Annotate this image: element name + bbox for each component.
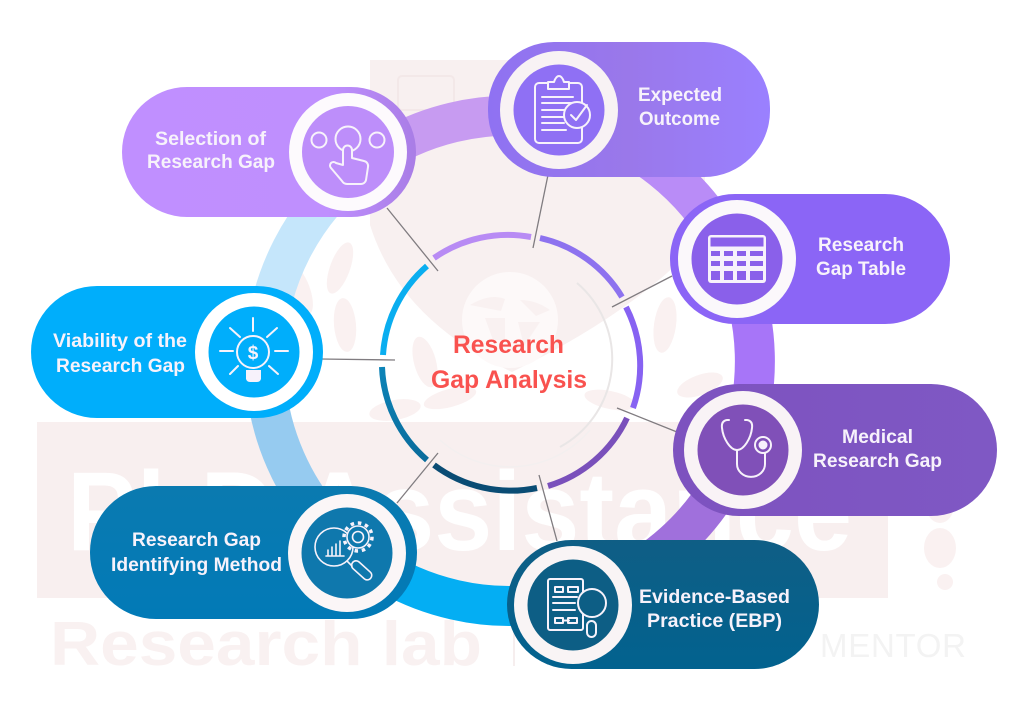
icon: document with magnifier (548, 579, 606, 637)
watermark: PhD Assistance Research lab logo: MENTOR (820, 627, 966, 664)
centre title: Research (453, 332, 564, 359)
panel: Selection of Research Gap (122, 87, 416, 217)
icon: table grid (708, 235, 766, 283)
panel: Expected Outcome: Expected (638, 85, 722, 106)
watermark: PhD Assistance Research lab logo: Research lab (50, 610, 482, 679)
panel: Viability of the Research Gap (31, 286, 323, 418)
panel: Research Gap Table: Research (818, 235, 904, 256)
outer ring (265, 116, 755, 606)
panel: Evidence-Based Practice (507, 540, 819, 669)
panel: Expected Outcome: Outcome (639, 109, 720, 130)
panel: Evidence-Based Practice: Practice (EBP) (647, 611, 782, 632)
panel: Research Gap Table (670, 194, 950, 324)
watermark: PhD Assistance Research lab logo (37, 60, 966, 679)
watermark: PhD Assistance Research lab logo: PhD Assistance (67, 449, 852, 574)
inner segmented ring (382, 235, 640, 491)
connector lines (320, 175, 677, 541)
panel: Medical Research Gap: Medical (842, 427, 913, 448)
centre title (431, 332, 587, 394)
icon: magnifier with chart and gear (315, 523, 374, 582)
panel: Evidence-Based Practice: Evidence-Based (639, 587, 790, 608)
panel: Medical Research Gap: Research Gap (813, 451, 942, 472)
panel: Research Gap Table: Gap Table (816, 259, 906, 280)
panel: Expected Outcome (488, 42, 770, 177)
icon: light bulb with dollar: $ (248, 343, 259, 364)
panel: Research Gap Identifying Method (90, 486, 417, 619)
panel: Research Gap Identifying Method: Identifying Method (111, 555, 282, 576)
panel: Viability of the Research Gap: Research Gap (56, 356, 185, 377)
panel: Selection of Research Gap: Research Gap (147, 152, 275, 173)
panel: Research Gap Identifying Method: Research Gap (132, 530, 261, 551)
centre title: Gap Analysis (431, 367, 587, 394)
panel: Selection of Research Gap: Selection of (155, 129, 267, 150)
panel: Viability of the Research Gap: Viability of the (53, 331, 187, 352)
icon: stethoscope (722, 420, 771, 477)
centre disc shadow (440, 283, 612, 467)
icon: tapping hand (312, 126, 384, 184)
panel: Medical Research Gap (673, 384, 997, 516)
icon: clipboard with check (535, 76, 590, 143)
icon: light bulb with dollar (220, 318, 288, 382)
